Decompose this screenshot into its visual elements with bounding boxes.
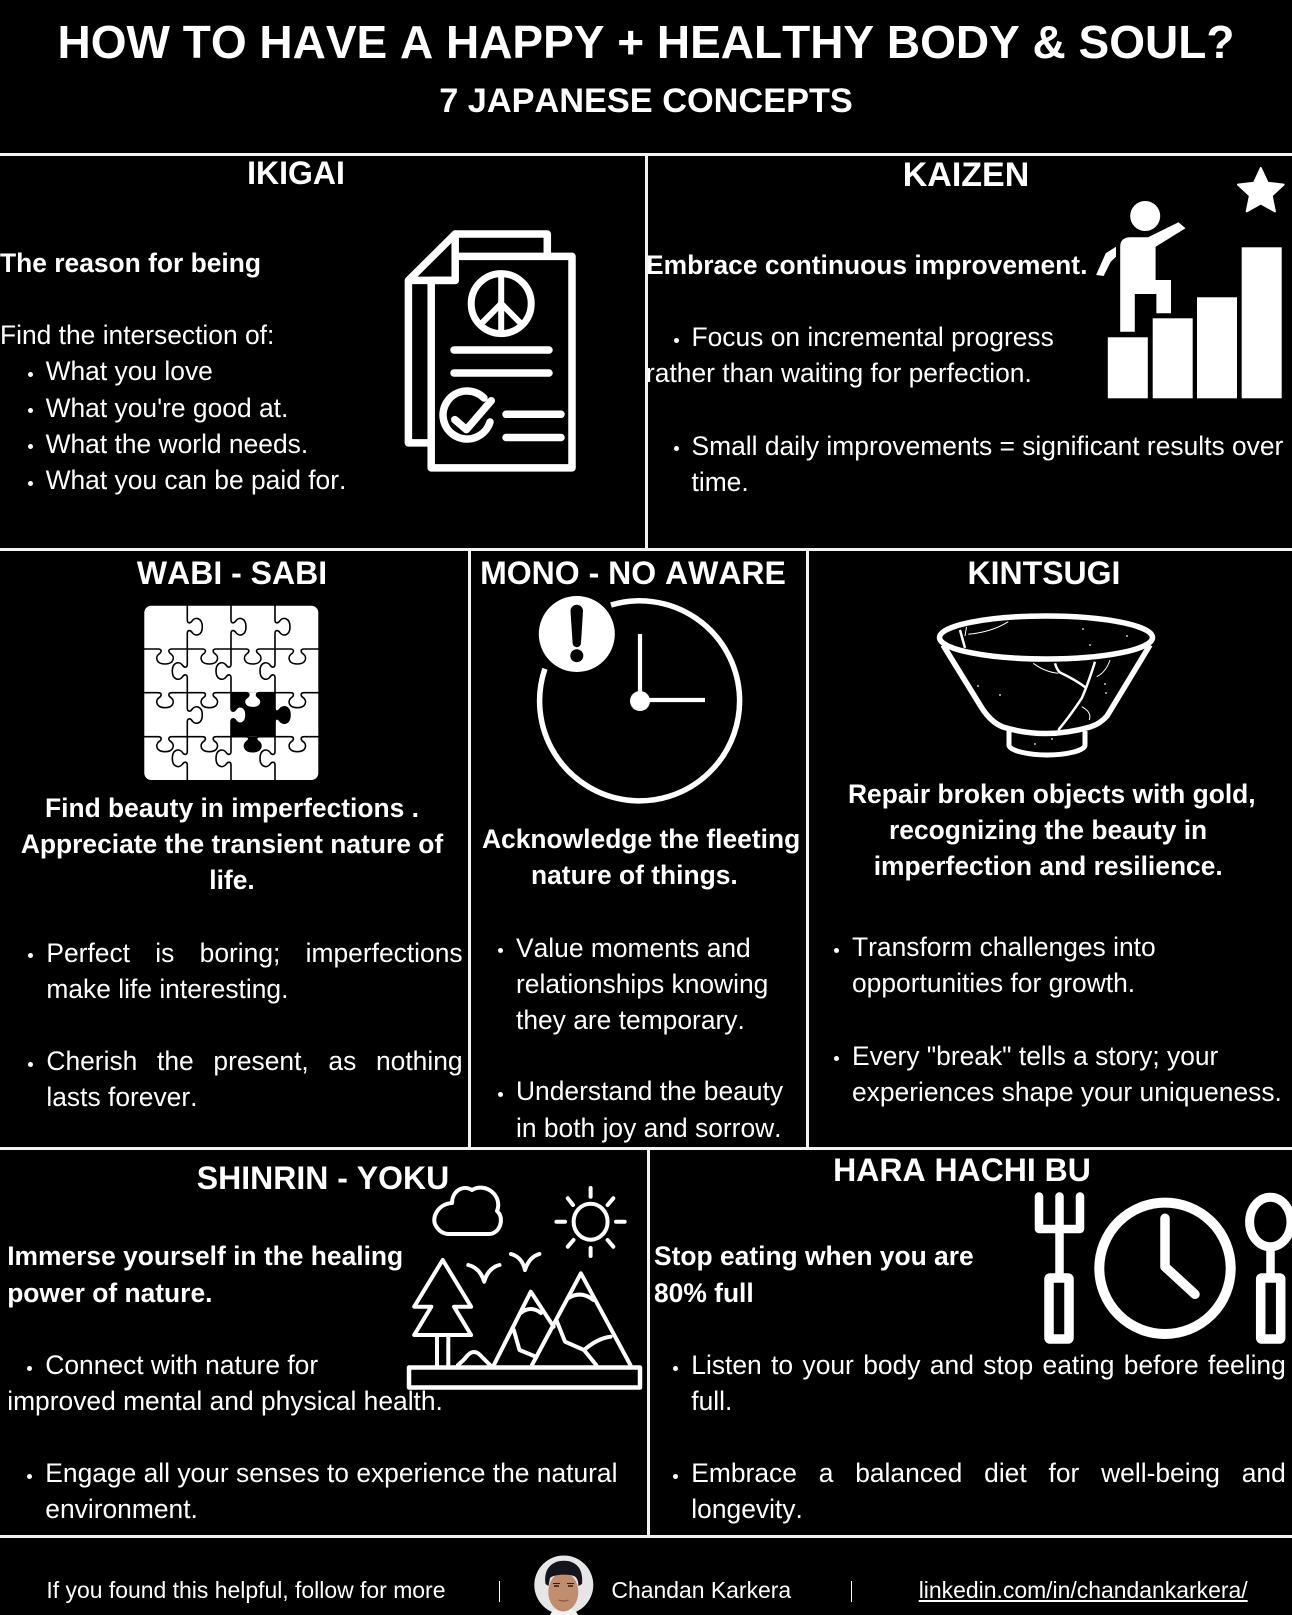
author photo [534, 1556, 594, 1615]
mono no aware list: they are temporary. [516, 1005, 745, 1035]
footer separator [499, 1581, 500, 1602]
kaizen list: time. [692, 467, 749, 497]
heading: kaizen: KAIZEN [903, 156, 1029, 194]
mono no aware list: Value moments and [516, 932, 751, 962]
ikigai tagline: The reason for being [0, 248, 261, 278]
wabi-sabi list: Perfect is boring; imperfections [46, 938, 463, 968]
shinrin-yoku list [7, 1350, 617, 1524]
ikigai list: What you can be paid for. [46, 465, 346, 495]
wabi-sabi list: make life interesting. [46, 974, 288, 1004]
kaizen list: Small daily improvements = significant results over [692, 431, 1283, 461]
shinrin-yoku tagline [7, 1241, 403, 1308]
ikigai list: What you're good at. [46, 393, 288, 423]
mono no aware list [498, 932, 783, 1143]
heading: ikigai: IKIGAI [247, 154, 345, 190]
heading: wabi-sabi: WABI - SABI [137, 555, 327, 591]
linkedin address: linkedin.com/in/chandankarkera/ [919, 1577, 1248, 1603]
kintsugi list: Transform challenges into [852, 932, 1156, 962]
kintsugi tagline: Repair broken objects with gold, [848, 778, 1256, 808]
icon: puzzle with missing piece [144, 606, 318, 780]
shinrin-yoku list: Connect with nature for [45, 1350, 318, 1380]
kaizen tagline: Embrace continuous improvement. [646, 250, 1087, 280]
hara hachi bu tagline: Stop eating when you are [654, 1241, 974, 1271]
panel: kintsugi [834, 555, 1282, 1107]
footer [46, 1556, 1248, 1615]
hara hachi bu tagline [654, 1241, 974, 1308]
mono no aware list: in both joy and sorrow. [516, 1113, 782, 1143]
icon: fork, clock and spoon [1034, 1192, 1292, 1344]
shinrin-yoku list: improved mental and physical health. [7, 1386, 443, 1416]
mono no aware list: Understand the beauty [516, 1076, 783, 1106]
hara hachi bu list: longevity. [691, 1494, 803, 1524]
shinrin-yoku list: environment. [45, 1494, 198, 1524]
heading: hara hachi bu: HARA HACHI BU [833, 1152, 1091, 1188]
panel: shinrin-yoku [7, 1160, 642, 1524]
wabi-sabi list: lasts forever. [46, 1082, 197, 1112]
wabi-sabi list [28, 938, 463, 1112]
hara hachi bu list: Listen to your body and stop eating before feeling [691, 1350, 1286, 1380]
heading: mono no aware: MONO - NO AWARE [480, 555, 786, 591]
kaizen list [646, 322, 1283, 497]
icon: person climbing bars toward star [1096, 167, 1285, 398]
hara hachi bu tagline: 80% full [654, 1278, 754, 1308]
heading: shinrin-yoku: SHINRIN - YOKU [197, 1160, 449, 1196]
wabi-sabi tagline: Find beauty in imperfections . [45, 793, 419, 823]
mono no aware tagline [482, 824, 800, 890]
panel: wabi-sabi [21, 555, 463, 1112]
mono no aware tagline: Acknowledge the fleeting [482, 824, 800, 854]
kintsugi tagline: imperfection and resilience. [874, 851, 1223, 881]
kintsugi list: experiences shape your uniqueness. [852, 1077, 1282, 1107]
panel: ikigai [0, 154, 576, 495]
subtitle: 7 JAPANESE CONCEPTS [439, 82, 853, 120]
shinrin-yoku tagline: power of nature. [7, 1278, 212, 1308]
kintsugi list: Every "break" tells a story; your [852, 1041, 1218, 1071]
mono no aware list: relationships knowing [516, 969, 768, 999]
icon: clock with exclamation badge [536, 596, 742, 804]
kintsugi list: opportunities for growth. [852, 968, 1135, 998]
hara hachi bu list [673, 1350, 1286, 1524]
wabi-sabi list: Cherish the present, as nothing [46, 1046, 463, 1076]
footer call to action: If you found this helpful, follow for more [46, 1577, 445, 1603]
hara hachi bu list: full. [691, 1386, 732, 1416]
kaizen list: rather than waiting for perfection. [646, 358, 1032, 388]
kintsugi list [834, 932, 1282, 1107]
wabi-sabi tagline [21, 793, 444, 895]
wabi-sabi tagline: life. [209, 865, 255, 895]
panel: hara hachi bu [654, 1152, 1292, 1524]
kintsugi tagline [848, 778, 1256, 881]
ikigai list: What the world needs. [46, 429, 308, 459]
panel: mono no aware [480, 555, 800, 1143]
mono no aware tagline: nature of things. [531, 860, 738, 890]
ikigai list: Find the intersection of: [0, 320, 274, 350]
footer separator [851, 1581, 852, 1602]
kaizen list: Focus on incremental progress [692, 322, 1054, 352]
title: HOW TO HAVE A HAPPY + HEALTHY BODY & SOUL? [58, 16, 1234, 68]
wabi-sabi tagline: Appreciate the transient nature of [21, 829, 443, 859]
ikigai list: What you love [46, 356, 213, 386]
panel: kaizen [646, 156, 1285, 497]
author name: Chandan Karkera [611, 1577, 791, 1603]
ikigai list [0, 320, 346, 495]
icon: document with peace sign and checkmark [404, 230, 576, 472]
hara hachi bu list: Embrace a balanced diet for well-being and [691, 1458, 1286, 1488]
icon: mountains, tree, sun and cloud [406, 1186, 642, 1390]
heading: kintsugi: KINTSUGI [968, 555, 1120, 591]
shinrin-yoku tagline: Immerse yourself in the healing [7, 1241, 403, 1271]
shinrin-yoku list: Engage all your senses to experience the natural [45, 1458, 617, 1488]
icon: repaired bowl [936, 613, 1156, 758]
kintsugi tagline: recognizing the beauty in [889, 815, 1207, 845]
header [58, 16, 1234, 120]
